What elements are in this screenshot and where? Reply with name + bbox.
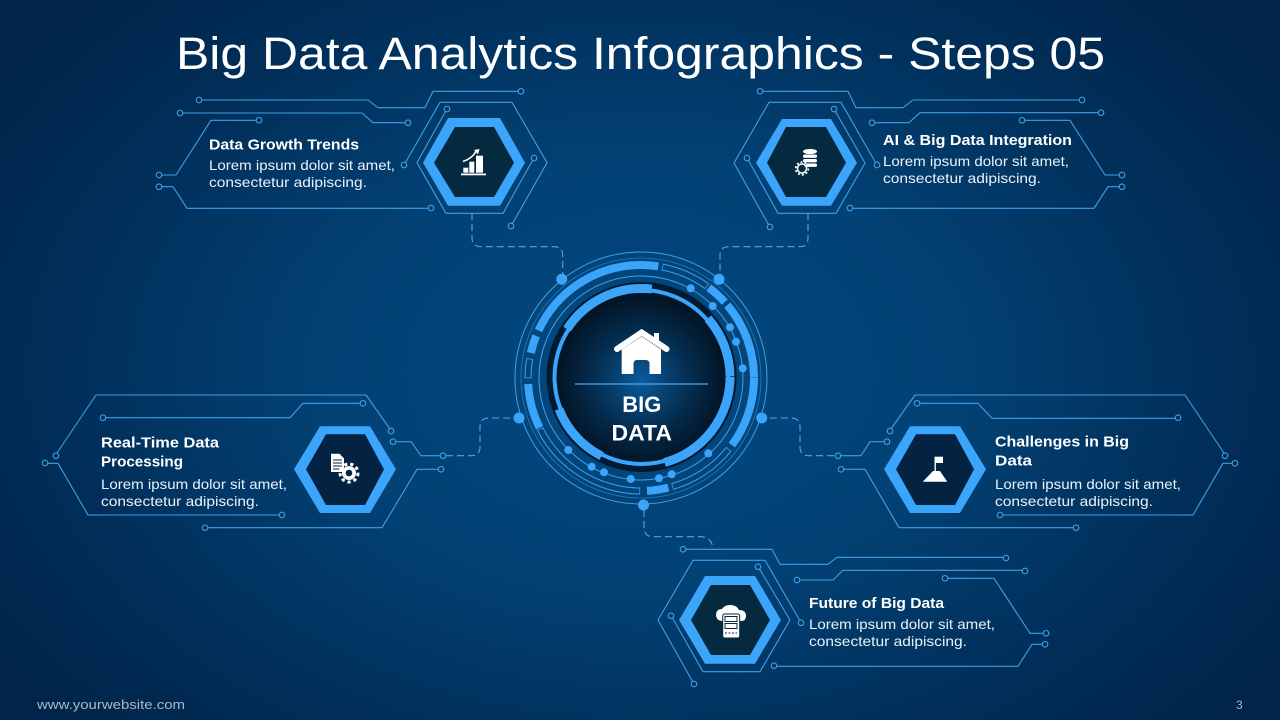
circuit lines — [42, 395, 446, 530]
circuit lines — [658, 546, 1049, 687]
panel: Real-Time Data Processing — [42, 395, 446, 530]
body text: Lorem ipsum dolor sit amet, — [209, 157, 395, 173]
hub label: DATA — [612, 421, 672, 446]
circuit lines — [156, 88, 547, 229]
outlined ring segments — [528, 265, 754, 491]
hexagon — [423, 118, 525, 206]
hexagon — [756, 119, 857, 206]
panel: Challenges in Big Data — [835, 395, 1238, 530]
heading — [995, 434, 1129, 470]
core disc — [558, 293, 726, 461]
dark backing ring — [546, 282, 736, 472]
dashed connector: step 4 to hub — [766, 418, 834, 456]
body text: consectetur adipiscing. — [995, 493, 1153, 509]
hub label: BIG — [622, 392, 661, 417]
body text: Lorem ipsum dolor sit amet, — [101, 476, 287, 492]
icon: document with gear — [331, 454, 358, 482]
heading: Challenges in Big — [995, 434, 1129, 450]
heading: AI & Big Data Integration — [883, 132, 1072, 149]
heading: Future of Big Data — [809, 595, 945, 612]
icon: mountain with flag — [923, 457, 947, 482]
heading: Real-Time Data — [101, 434, 220, 452]
dashed connector: step 2 to hub — [720, 213, 808, 275]
outer tech rings — [515, 252, 767, 504]
dashed connector: step 1 to hub — [472, 213, 563, 275]
inner blue ring — [553, 288, 730, 466]
circuit lines — [835, 395, 1238, 530]
heading: Processing — [101, 454, 183, 470]
body text: consectetur adipiscing. — [101, 493, 259, 509]
hub label — [612, 392, 672, 446]
panel: Data Growth Trends — [156, 88, 547, 229]
icon: cloud server — [716, 605, 746, 638]
body text — [101, 476, 287, 509]
body text — [995, 476, 1181, 509]
body text — [209, 157, 395, 190]
ring dots — [564, 284, 747, 483]
body text: Lorem ipsum dolor sit amet, — [809, 616, 995, 632]
body text — [883, 153, 1069, 186]
dashed connector: step 3 to hub — [446, 418, 515, 456]
icon: house — [617, 332, 666, 374]
circuit lines — [734, 88, 1125, 230]
divider line — [575, 383, 708, 385]
body text: consectetur adipiscing. — [809, 633, 967, 649]
panel: Future of Big Data — [658, 546, 1049, 687]
heading — [101, 434, 220, 470]
icon: growth chart — [461, 149, 486, 175]
hexagon — [884, 426, 986, 513]
panel: AI & Big Data Integration — [734, 88, 1125, 230]
dashed connector: step 5 to hub — [644, 510, 713, 549]
body text: consectetur adipiscing. — [883, 170, 1041, 186]
body text: Lorem ipsum dolor sit amet, — [883, 153, 1069, 169]
heading: Data — [995, 452, 1033, 470]
body text — [809, 616, 995, 649]
page number: 3 — [1236, 698, 1243, 712]
hexagon — [294, 426, 396, 513]
heading: Data Growth Trends — [209, 136, 359, 154]
footer website: www.yourwebsite.com — [36, 697, 185, 712]
title: Big Data Analytics Infographics - Steps 05 — [176, 28, 1105, 79]
body text: Lorem ipsum dolor sit amet, — [995, 476, 1181, 492]
central hub — [514, 252, 767, 510]
body text: consectetur adipiscing. — [209, 174, 367, 190]
icon: database with gear — [796, 149, 817, 175]
connector nodes — [514, 274, 767, 510]
hexagon — [679, 576, 781, 664]
